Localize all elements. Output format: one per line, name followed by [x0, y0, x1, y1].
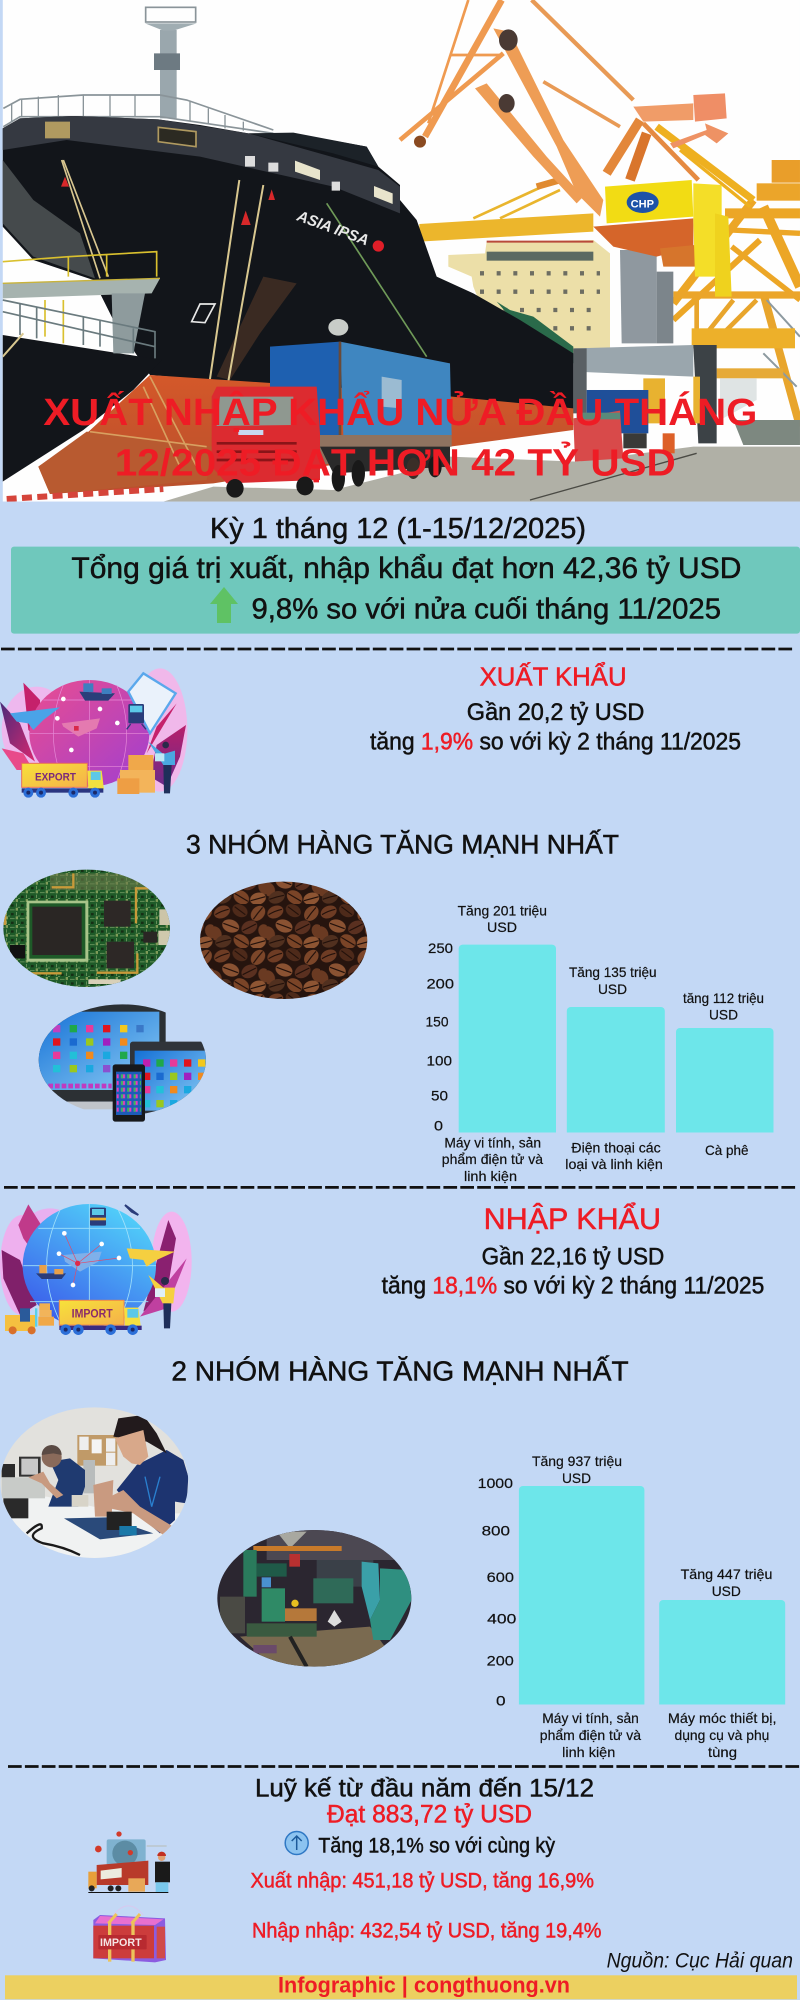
crane cabin and gantry: CHP	[631, 198, 654, 210]
category labels	[442, 1134, 749, 1184]
value labels: tăng 112 triệu	[683, 990, 764, 1006]
value labels	[458, 902, 764, 1023]
value labels: Tăng 135 triệu	[569, 964, 657, 980]
icon: import illustration	[0, 1204, 192, 1335]
category labels: Máy móc thiết bị,	[668, 1710, 776, 1726]
icon: import crate	[93, 1906, 166, 1962]
value labels: USD	[562, 1470, 591, 1486]
axis labels: 0	[496, 1693, 506, 1709]
import label: IMPORT	[100, 1937, 142, 1949]
value labels: Tăng 447 triệu	[681, 1566, 772, 1582]
quay ground	[163, 447, 800, 502]
right yellow crane lattice	[673, 200, 800, 427]
value labels: USD	[598, 981, 627, 997]
export value: Gần 20,2 tỷ USD	[467, 699, 644, 726]
category labels: Máy vi tính, sản	[542, 1710, 639, 1726]
value labels: USD	[712, 1583, 741, 1599]
category labels: linh kiện	[464, 1168, 517, 1184]
category labels: Cà phê	[705, 1142, 749, 1158]
category labels: linh kiện	[562, 1744, 615, 1760]
category labels: phẩm điện tử và	[442, 1151, 543, 1167]
import value: Gần 22,16 tỷ USD	[482, 1243, 664, 1270]
footer bar	[5, 1972, 797, 1999]
bar chart: export growth	[426, 902, 774, 1184]
axis labels: 200	[487, 1653, 514, 1669]
value labels: USD	[709, 1007, 738, 1023]
cumulative growth: Tăng 18,1% so với cùng kỳ	[318, 1835, 555, 1858]
photo: circuit board	[0, 867, 173, 990]
category labels: Máy vi tính, sản	[444, 1134, 541, 1150]
category labels: dụng cụ và phụ	[674, 1727, 769, 1743]
icon: circled up arrow	[285, 1832, 308, 1854]
import heading: NHẬP KHẨU	[484, 1202, 661, 1236]
import label: IMPORT	[72, 1307, 113, 1321]
value labels: Tăng 937 triệu	[532, 1453, 622, 1469]
export label: EXPORT	[35, 772, 76, 784]
icon: green up arrow	[210, 587, 238, 623]
cream ship superstructure	[448, 240, 610, 363]
import growth: tăng 18,1% so với kỳ 2 tháng 11/2025	[382, 1272, 764, 1299]
total value text: Tổng giá trị xuất, nhập khẩu đạt hơn 42,36 tỷ USD	[71, 552, 741, 585]
axis labels: 0	[434, 1117, 443, 1133]
far truck and workers	[573, 390, 675, 462]
axis labels: 50	[431, 1087, 448, 1103]
photo: coffee beans	[200, 882, 367, 999]
axis labels: 800	[482, 1522, 510, 1538]
category labels: phẩm điện tử và	[540, 1727, 641, 1743]
axis labels: 200	[426, 976, 454, 992]
axis labels: 1000	[478, 1475, 513, 1491]
icon: export truck	[88, 1831, 170, 1893]
cumulative heading: Luỹ kế từ đầu năm đến 15/12	[255, 1775, 594, 1803]
value labels: Tăng 201 triệu	[458, 902, 547, 918]
export heading: XUẤT KHẨU	[480, 662, 627, 692]
category labels: tùng	[708, 1744, 737, 1760]
photo: factory machinery	[213, 1527, 417, 1670]
axis labels: 400	[487, 1610, 517, 1626]
ship mast and railing	[3, 7, 273, 133]
left pier and tug	[3, 252, 162, 482]
cumulative value: Đạt 883,72 tỷ USD	[327, 1800, 532, 1828]
footer text: Infographic | congthuong.vn	[278, 1972, 570, 1997]
photo: electronics workers	[0, 1407, 190, 1560]
ship hull	[3, 116, 573, 494]
photo: laptop, tablet and phone	[33, 1003, 206, 1122]
axis labels: 150	[426, 1014, 449, 1030]
heading: 2 product groups: 2 NHÓM HÀNG TĂNG MẠNH NHẤT	[171, 1356, 629, 1387]
category labels: loại và linh kiện	[565, 1156, 663, 1172]
bars	[459, 945, 774, 1132]
axis labels: 600	[487, 1569, 514, 1585]
growth text: 9,8% so với nửa cuối tháng 11/2025	[252, 594, 721, 626]
icon: export illustration	[0, 668, 187, 798]
category labels: Điện thoại các	[571, 1140, 661, 1156]
category labels	[540, 1710, 776, 1760]
blue container and red truck	[212, 342, 452, 498]
axis labels	[478, 1475, 517, 1709]
axis labels	[426, 940, 454, 1133]
value labels: USD	[487, 919, 517, 935]
import total: Nhập nhập: 432,54 tỷ USD, tăng 19,4%	[252, 1919, 602, 1942]
app icons	[53, 1025, 144, 1072]
heading: 3 product groups: 3 NHÓM HÀNG TĂNG MẠNH NHẤT	[186, 828, 619, 860]
crane cabin and gantry	[419, 180, 800, 445]
axis labels: 100	[426, 1052, 452, 1068]
export growth: tăng 1,9% so với kỳ 2 tháng 11/2025	[370, 728, 741, 755]
title: XUẤT NHẬP KHẨU NỬA ĐẦU THÁNG	[43, 389, 757, 434]
orange crane booms	[400, 0, 753, 218]
hero photo: cargo ship and cranes at port	[3, 0, 800, 502]
bars	[519, 1486, 785, 1704]
axis labels: 250	[428, 940, 453, 956]
period heading: Kỳ 1 tháng 12 (1-15/12/2025)	[210, 513, 586, 545]
bar chart: import growth	[478, 1453, 785, 1760]
ship hull: ASIA IPSA	[294, 207, 371, 249]
value labels	[532, 1453, 772, 1599]
title	[43, 389, 757, 485]
export total: Xuất nhập: 451,18 tỷ USD, tăng 16,9%	[250, 1870, 594, 1893]
title: 12/2025 ĐẠT HƠN 42 TỶ USD	[115, 441, 676, 485]
panel: total trade value	[11, 547, 800, 634]
